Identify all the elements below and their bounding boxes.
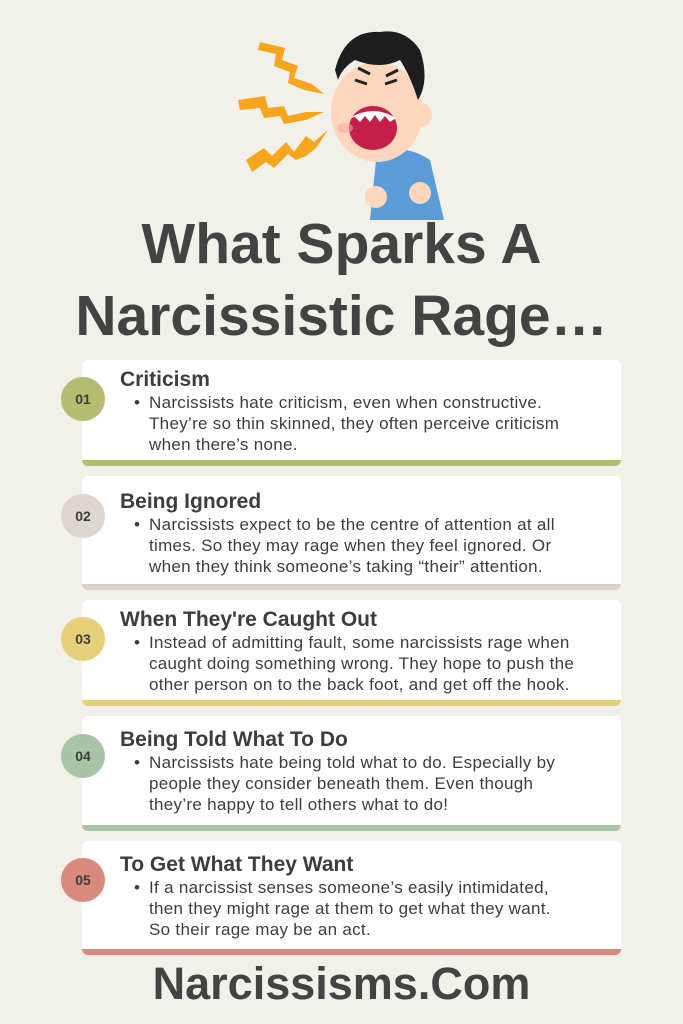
badge 04 — [61, 734, 105, 778]
card 4: being told what to do — [82, 716, 621, 831]
card 5: get what they want: So their rage may be an act. — [149, 920, 371, 939]
icon: lightning bolts — [238, 42, 328, 172]
badge 03 — [61, 617, 105, 661]
card 4: being told what to do: they’re happy to tell others what to do! — [149, 795, 448, 814]
card 2: being ignored: when they think someone’s taking “their” attention. — [149, 557, 543, 576]
title — [75, 212, 608, 348]
badge 05: 05 — [75, 872, 91, 888]
card 2: being ignored: times. So they may rage when they feel ignored. Or — [149, 536, 551, 555]
card 5: get what they want: To Get What They Want — [120, 853, 353, 876]
title: What Sparks A — [141, 212, 542, 276]
card 1: criticism: when there’s none. — [149, 435, 298, 454]
badge 04: 04 — [75, 748, 91, 764]
card 2: being ignored — [82, 476, 621, 590]
card 1: criticism — [82, 360, 621, 466]
card 1: criticism: Narcissists hate criticism, even when constructive. — [149, 393, 542, 412]
card 4: being told what to do: Being Told What To Do — [120, 728, 348, 751]
title: Narcissistic Rage… — [75, 284, 608, 348]
card 1: criticism: They’re so thin skinned, they often perceive criticism — [149, 414, 559, 433]
badge 03: 03 — [75, 631, 91, 647]
card 5: get what they want: If a narcissist senses someone’s easily intimidated, — [149, 878, 549, 897]
card 4: being told what to do: Narcissists hate being told what to do. Especially by — [149, 753, 555, 772]
badge 01 — [61, 377, 105, 421]
badge 02 — [61, 494, 105, 538]
card 3: caught out — [82, 600, 621, 706]
card 3: caught out: When They're Caught Out — [120, 608, 377, 631]
card 3: caught out: Instead of admitting fault, some narcissists rage when — [149, 633, 570, 652]
card 2: being ignored: Narcissists expect to be the centre of attention at all — [149, 515, 555, 534]
badge 05 — [61, 858, 105, 902]
card 3: caught out: other person on to the back foot, and get off the hook. — [149, 675, 570, 694]
card 2: being ignored: Being Ignored — [120, 490, 261, 513]
card 4: being told what to do: people they consider beneath them. Even though — [149, 774, 533, 793]
badge 01: 01 — [75, 391, 91, 407]
illustration: angry man shouting — [238, 31, 444, 220]
footer: Narcissisms.Com — [153, 958, 530, 1009]
man — [331, 31, 444, 220]
card 5: get what they want: then they might rage at them to get what they want. — [149, 899, 551, 918]
card 1: criticism: Criticism — [120, 368, 210, 391]
card 3: caught out: caught doing something wrong. They hope to push the — [149, 654, 574, 673]
badge 02: 02 — [75, 508, 91, 524]
card 5: get what they want — [82, 841, 621, 955]
